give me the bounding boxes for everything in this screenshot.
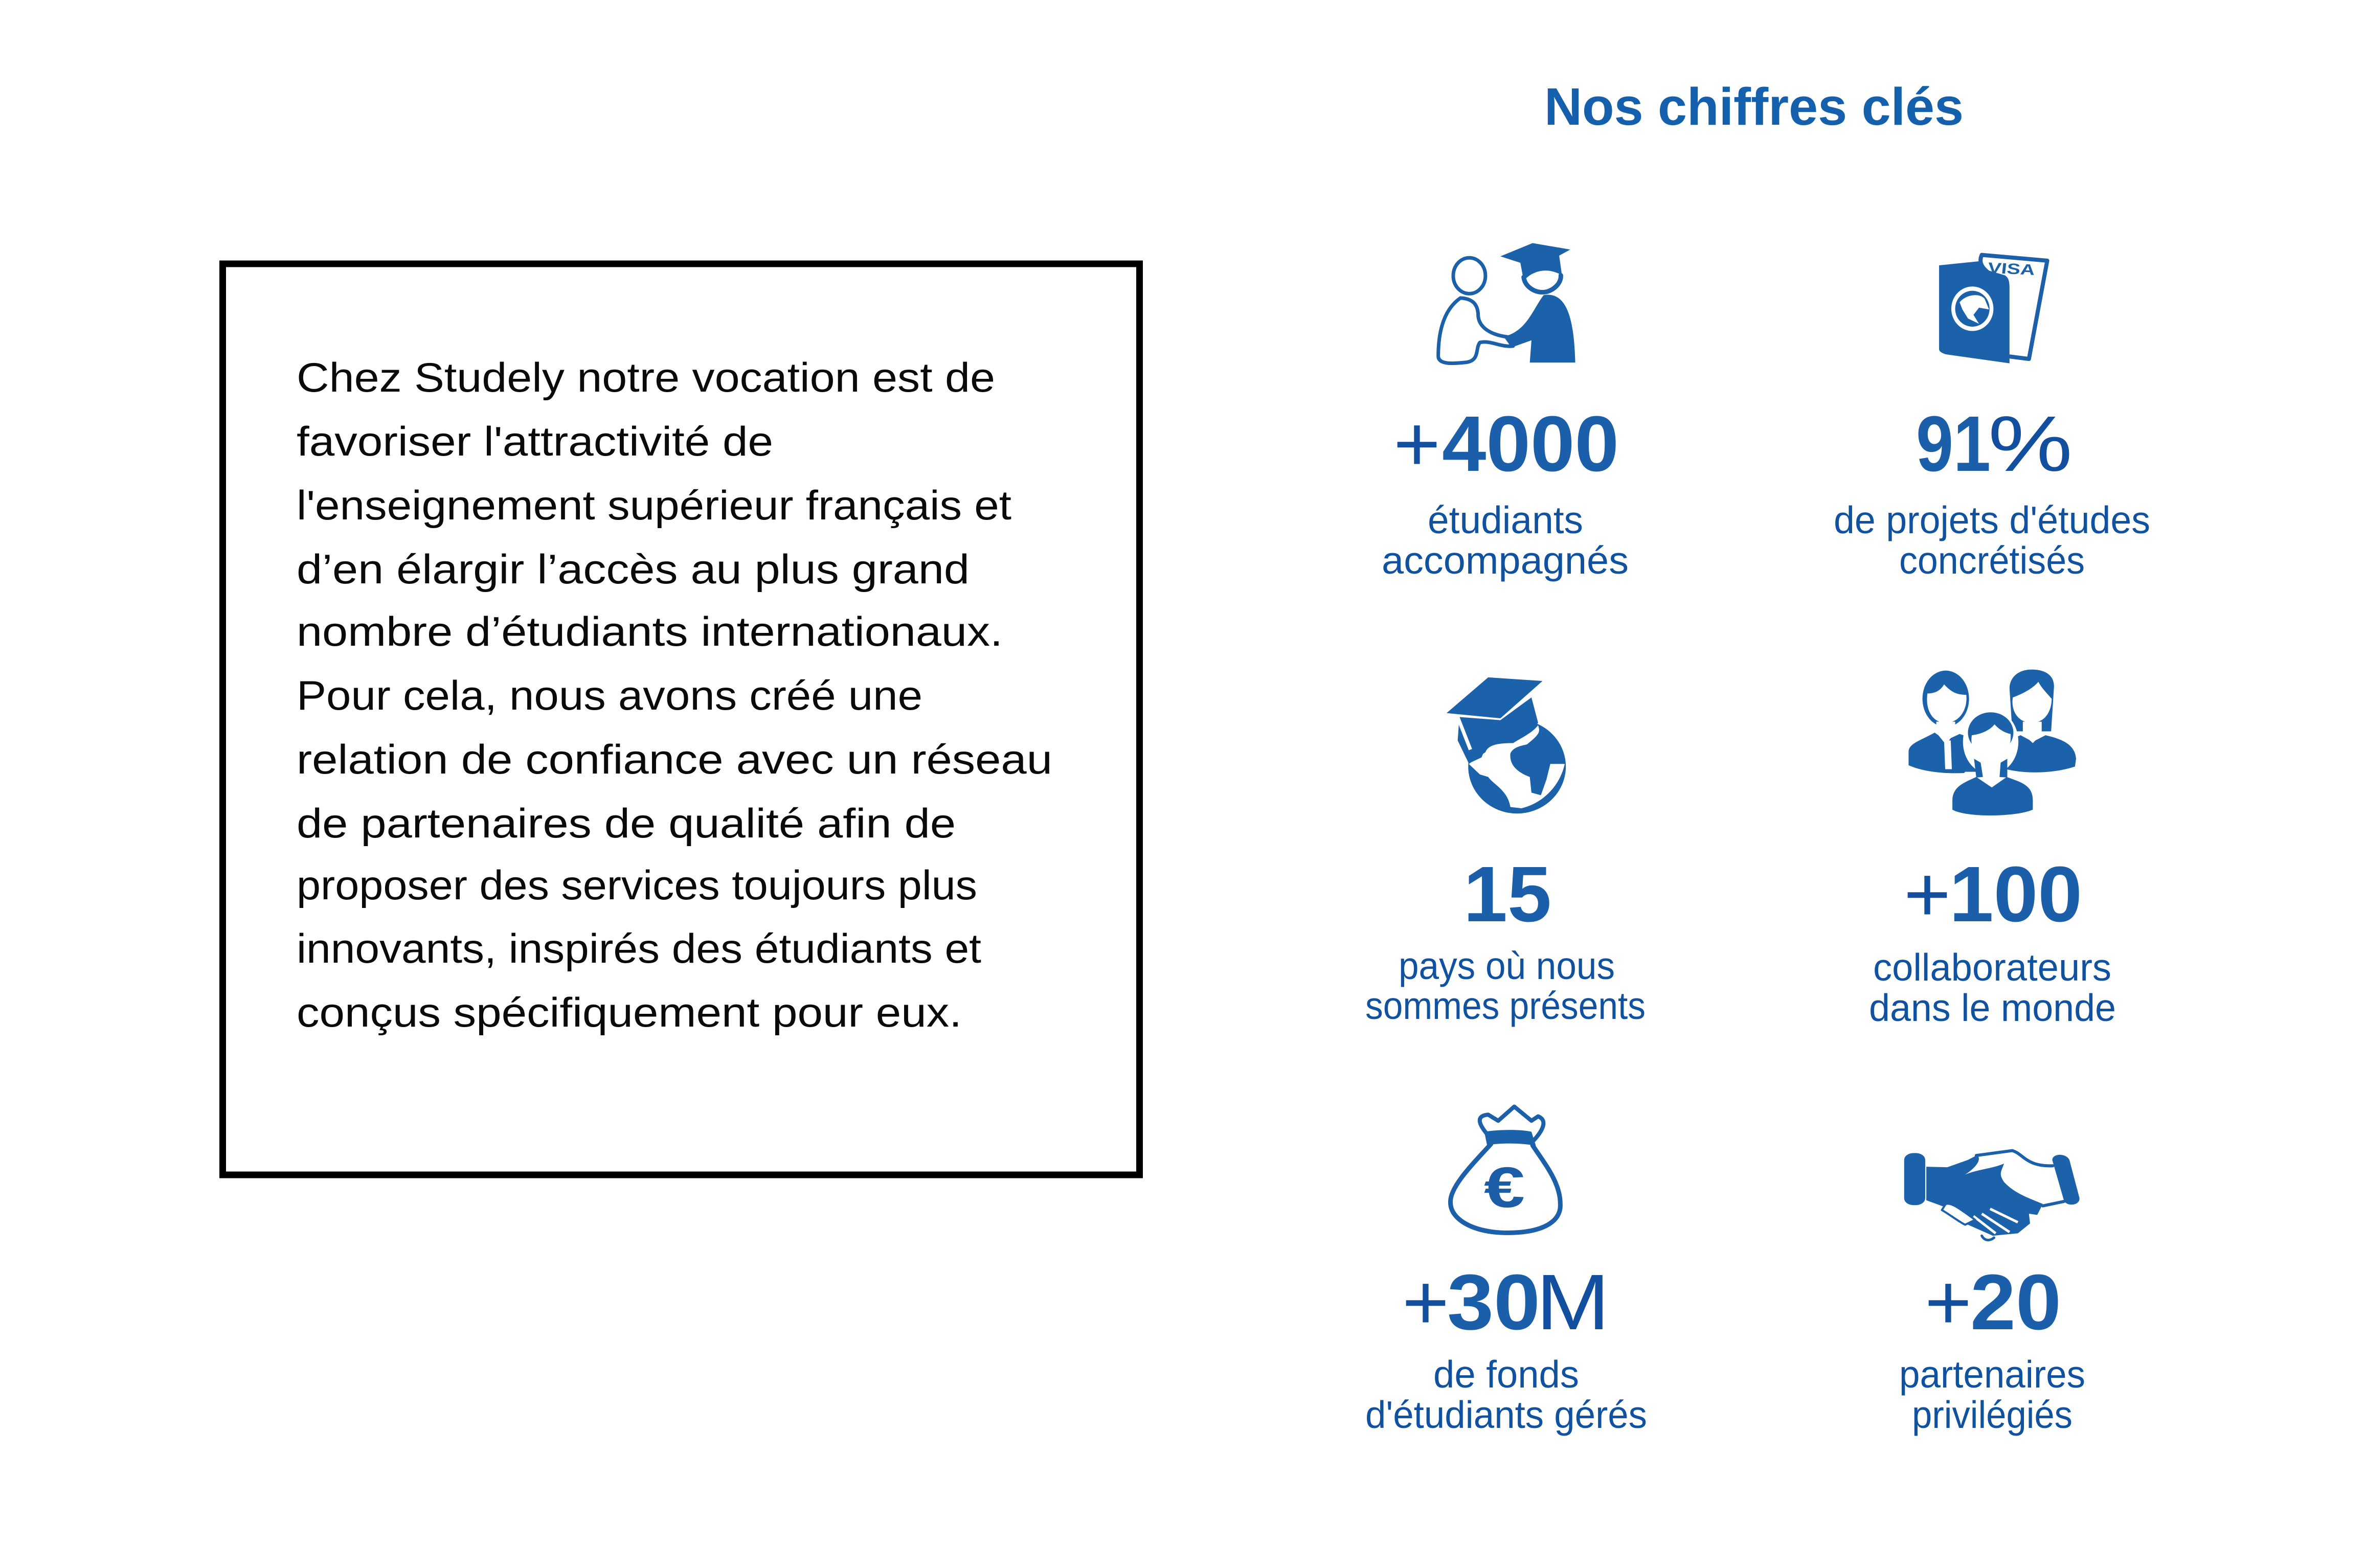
- title: Nos chiffres clés: [1544, 77, 1964, 136]
- stat: +100: [1869, 850, 2116, 1029]
- icon: graduation cap on globe: [1447, 677, 1566, 813]
- text block: mission paragraph: d’en élargir l’accès au plus grand: [297, 547, 970, 593]
- icon: passport with visa: [1939, 255, 2047, 363]
- stat: +30M: d'étudiants gérés: [1365, 1393, 1647, 1436]
- stat: +30M: +: [1402, 1258, 1449, 1346]
- stat: +30M: M: [1536, 1258, 1610, 1346]
- text block: mission paragraph: nombre d’étudiants internationaux.: [297, 609, 1003, 655]
- text block: mission paragraph: Chez Studely notre vocation est de: [297, 355, 995, 401]
- stat: +20: +: [1925, 1258, 1972, 1346]
- stat: 15: pays où nous: [1399, 944, 1615, 987]
- stat: +4000: +: [1393, 400, 1440, 488]
- stat: 91%: 91: [1916, 400, 1991, 488]
- icon: three collaborators: [1908, 670, 2076, 819]
- stat: +30M: 30: [1447, 1258, 1540, 1346]
- stat: 15: sommes présents: [1365, 984, 1646, 1027]
- stat: +30M: de fonds: [1433, 1353, 1579, 1396]
- stat: +4000: 4000: [1442, 400, 1619, 488]
- stat: 91%: concrétisés: [1899, 539, 2085, 582]
- icon: handshake: [1904, 1151, 2080, 1240]
- icon: student handshake: [1438, 243, 1575, 363]
- text block: mission paragraph: relation de confiance avec un réseau: [297, 737, 1052, 783]
- icon: euro sign: €: [1484, 1155, 1525, 1219]
- stat: +100: collaborateurs: [1873, 946, 2111, 989]
- stat: +20: [1899, 1258, 2085, 1436]
- stat: 15: [1365, 850, 1646, 1027]
- stat: +20: partenaires: [1899, 1353, 2085, 1396]
- text block: mission paragraph: proposer des services toujours plus: [297, 862, 977, 908]
- stat: +20: privilégiés: [1912, 1393, 2073, 1436]
- stat: 15: 15: [1463, 850, 1551, 938]
- panel: mission statement: [223, 264, 1139, 1175]
- stat: +20: 20: [1970, 1258, 2061, 1346]
- stat: +4000: [1382, 400, 1629, 582]
- stat: 91%: %: [1988, 400, 2073, 488]
- stat: 91%: de projets d'études: [1834, 498, 2150, 541]
- icon: euro money bag: [1450, 1106, 1560, 1233]
- text block: mission paragraph: conçus spécifiquement pour eux.: [297, 990, 962, 1036]
- text block: mission paragraph: favoriser l'attractivité de: [297, 419, 773, 465]
- stat: +30M: [1365, 1258, 1647, 1436]
- stat: +4000: étudiants: [1428, 498, 1583, 541]
- stat: +100: 100: [1949, 850, 2082, 938]
- icon: passport with visa: VISA: [1987, 260, 2036, 279]
- text block: mission paragraph: innovants, inspirés des étudiants et: [297, 926, 981, 972]
- text block: mission paragraph: Pour cela, nous avons créé une: [297, 673, 922, 719]
- stat: +100: +: [1904, 850, 1951, 938]
- stat: 91%: [1834, 400, 2150, 582]
- text block: mission paragraph: de partenaires de qualité afin de: [297, 801, 956, 847]
- text block: mission paragraph: [297, 355, 1052, 1036]
- stat: +100: dans le monde: [1869, 986, 2116, 1029]
- stat: +4000: accompagnés: [1382, 539, 1629, 582]
- text block: mission paragraph: l'enseignement supérieur français et: [297, 483, 1011, 529]
